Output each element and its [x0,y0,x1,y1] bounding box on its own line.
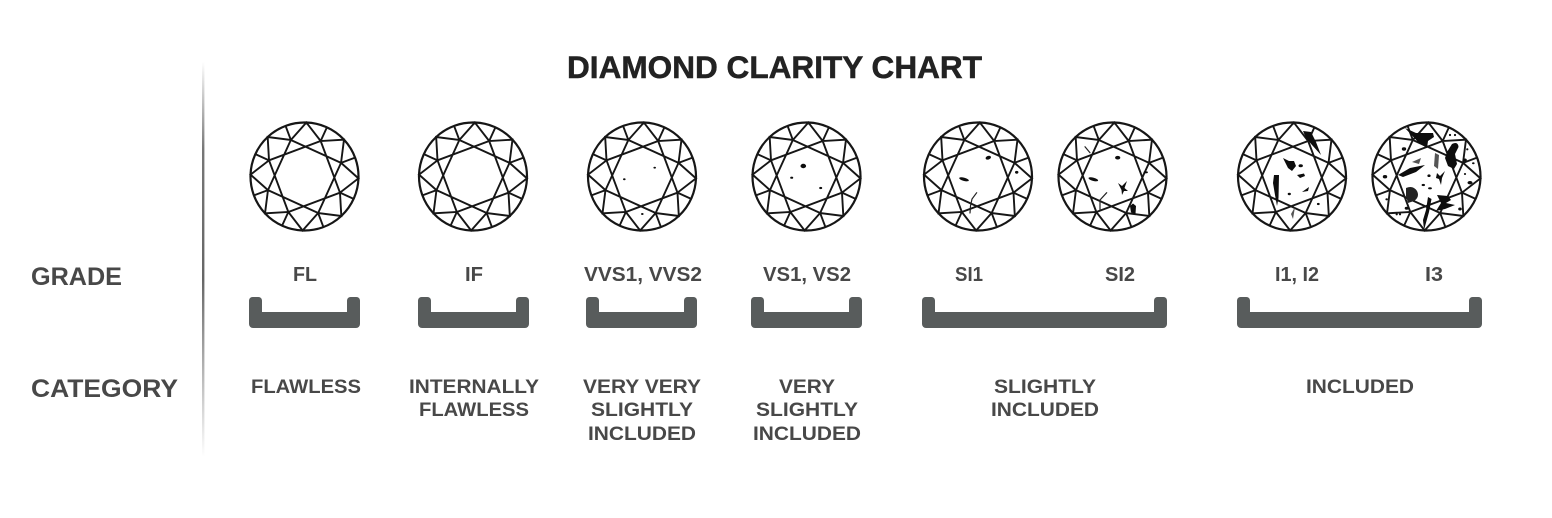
category: very slightly included [753,376,861,445]
bracket: VS [751,297,862,328]
bracket: IF [418,297,529,328]
bracket: VVS [586,297,697,328]
category: very slightly included: VERY [779,376,835,398]
grade label: SI1: SI1 [955,264,983,286]
category: very slightly included: INCLUDED [753,423,861,445]
category: flawless: FLAWLESS [251,376,361,398]
category: very very slightly included: VERY VERY [583,376,701,398]
grade label: VS1, VS2: VS1, VS2 [763,264,851,286]
category: included: INCLUDED [1306,376,1414,398]
category: slightly included [991,376,1099,421]
category: very very slightly included: INCLUDED [588,423,696,445]
category: internally flawless [409,376,539,421]
category: very very slightly included [583,376,701,445]
diamond: SI1 [922,121,1034,232]
row heading: grade: GRADE [31,263,122,291]
diamond: SI2 [1057,121,1168,232]
diamond: VS1, VS2 [751,121,862,232]
diamond: IF [417,121,529,232]
title: DIAMOND CLARITY CHART [567,49,982,85]
diamond: I1, I2 [1236,121,1348,232]
grade label: IF: IF [465,264,483,286]
grade label: SI2: SI2 [1105,264,1135,286]
category: internally flawless: INTERNALLY [409,376,539,398]
category: very very slightly included: SLIGHTLY [591,399,693,421]
grade label: I1, I2: I1, I2 [1275,264,1319,286]
diamond: I3 [1371,121,1482,232]
grade label: FL: FL [293,264,317,286]
bracket: FL [249,297,360,328]
bracket: SI [922,297,1167,328]
category: internally flawless: FLAWLESS [419,399,529,421]
row heading: category: CATEGORY [31,375,178,403]
diamond: VVS1, VVS2 [586,121,698,232]
category: slightly included: SLIGHTLY [994,376,1096,398]
category: very slightly included: SLIGHTLY [756,399,858,421]
grade label: VVS1, VVS2: VVS1, VVS2 [584,264,702,286]
grade label: I3: I3 [1425,264,1443,286]
category: slightly included: INCLUDED [991,399,1099,421]
diamond: FL [249,121,360,232]
bracket: I [1237,297,1482,328]
vertical divider [202,62,204,457]
